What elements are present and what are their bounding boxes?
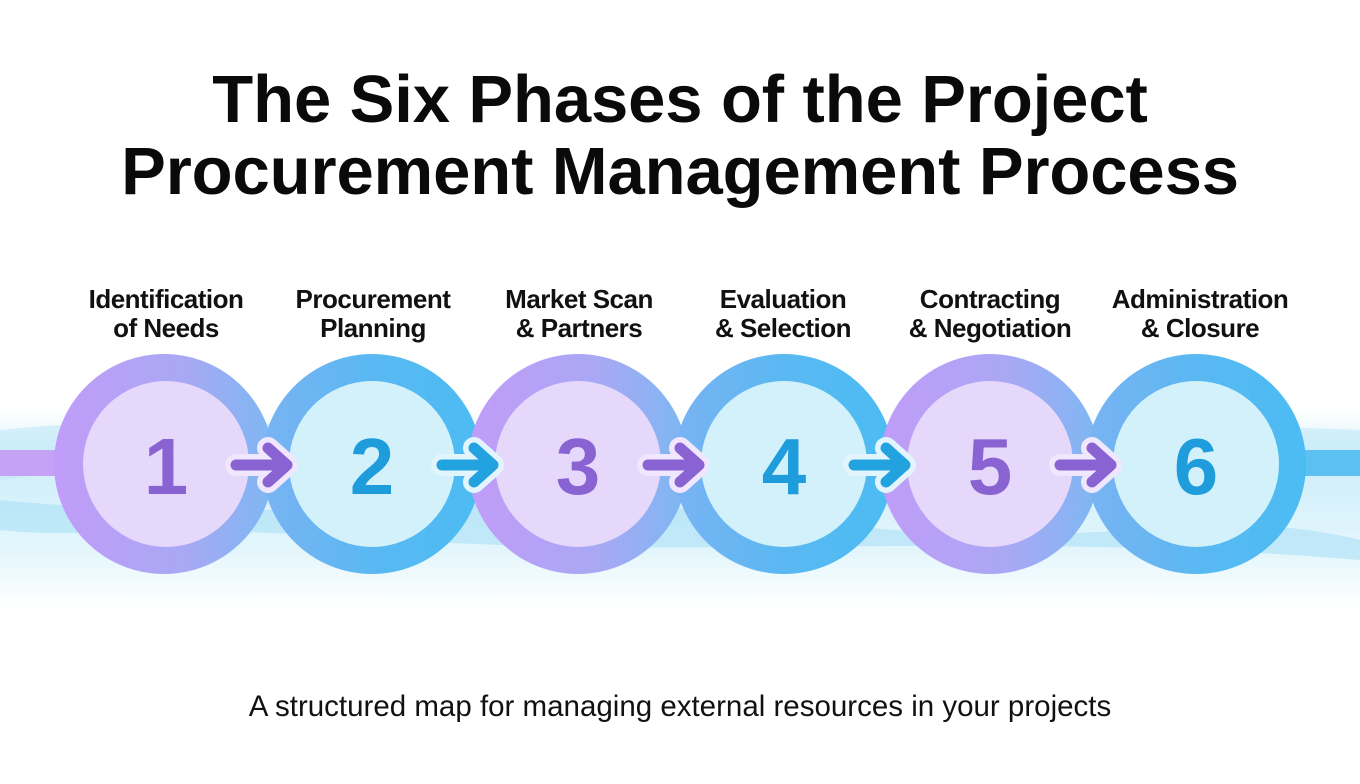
circle 5 xyxy=(880,354,1100,574)
arrow 1-2 xyxy=(236,448,287,482)
label 5 xyxy=(909,284,1071,343)
label 3 xyxy=(505,284,653,343)
label 4 xyxy=(715,284,851,343)
label 3: Market Scan xyxy=(505,284,653,314)
circle 3: 3 xyxy=(556,422,600,511)
label 6: Administration xyxy=(1112,284,1288,314)
circle 5: 5 xyxy=(968,422,1012,511)
circle 4: 4 xyxy=(762,422,807,511)
circle 2: 2 xyxy=(350,422,394,511)
circle 1 xyxy=(54,354,274,574)
circle 6: 6 xyxy=(1174,422,1218,511)
label 5: & Negotiation xyxy=(909,313,1071,343)
circle 1: 1 xyxy=(144,422,188,511)
title: The Six Phases of the Project xyxy=(212,62,1148,137)
label 2: Procurement xyxy=(296,284,450,314)
label 5: Contracting xyxy=(920,284,1060,314)
title xyxy=(121,62,1239,209)
circle 4 xyxy=(674,354,894,574)
arrow 4-5 xyxy=(854,448,905,482)
label 3: & Partners xyxy=(516,313,642,343)
label 2 xyxy=(296,284,451,343)
circle 3 xyxy=(468,354,688,574)
label 6 xyxy=(1112,284,1288,343)
arrow 2-3 xyxy=(442,448,493,482)
label 1: of Needs xyxy=(113,313,219,343)
label 2: Planning xyxy=(320,313,426,343)
label 1 xyxy=(89,284,243,343)
title: Procurement Management Process xyxy=(121,134,1239,209)
arrow 5-6 xyxy=(1060,448,1111,482)
label 6: & Closure xyxy=(1141,313,1259,343)
connector bars xyxy=(0,450,80,476)
arrow 3-4 xyxy=(648,448,699,482)
label 4: & Selection xyxy=(715,313,851,343)
label 1: Identification xyxy=(89,284,243,314)
label 4: Evaluation xyxy=(720,284,846,314)
circle 6 xyxy=(1086,354,1306,574)
subtitle: A structured map for managing external resources in your projects xyxy=(249,690,1111,723)
circle 2 xyxy=(262,354,482,574)
